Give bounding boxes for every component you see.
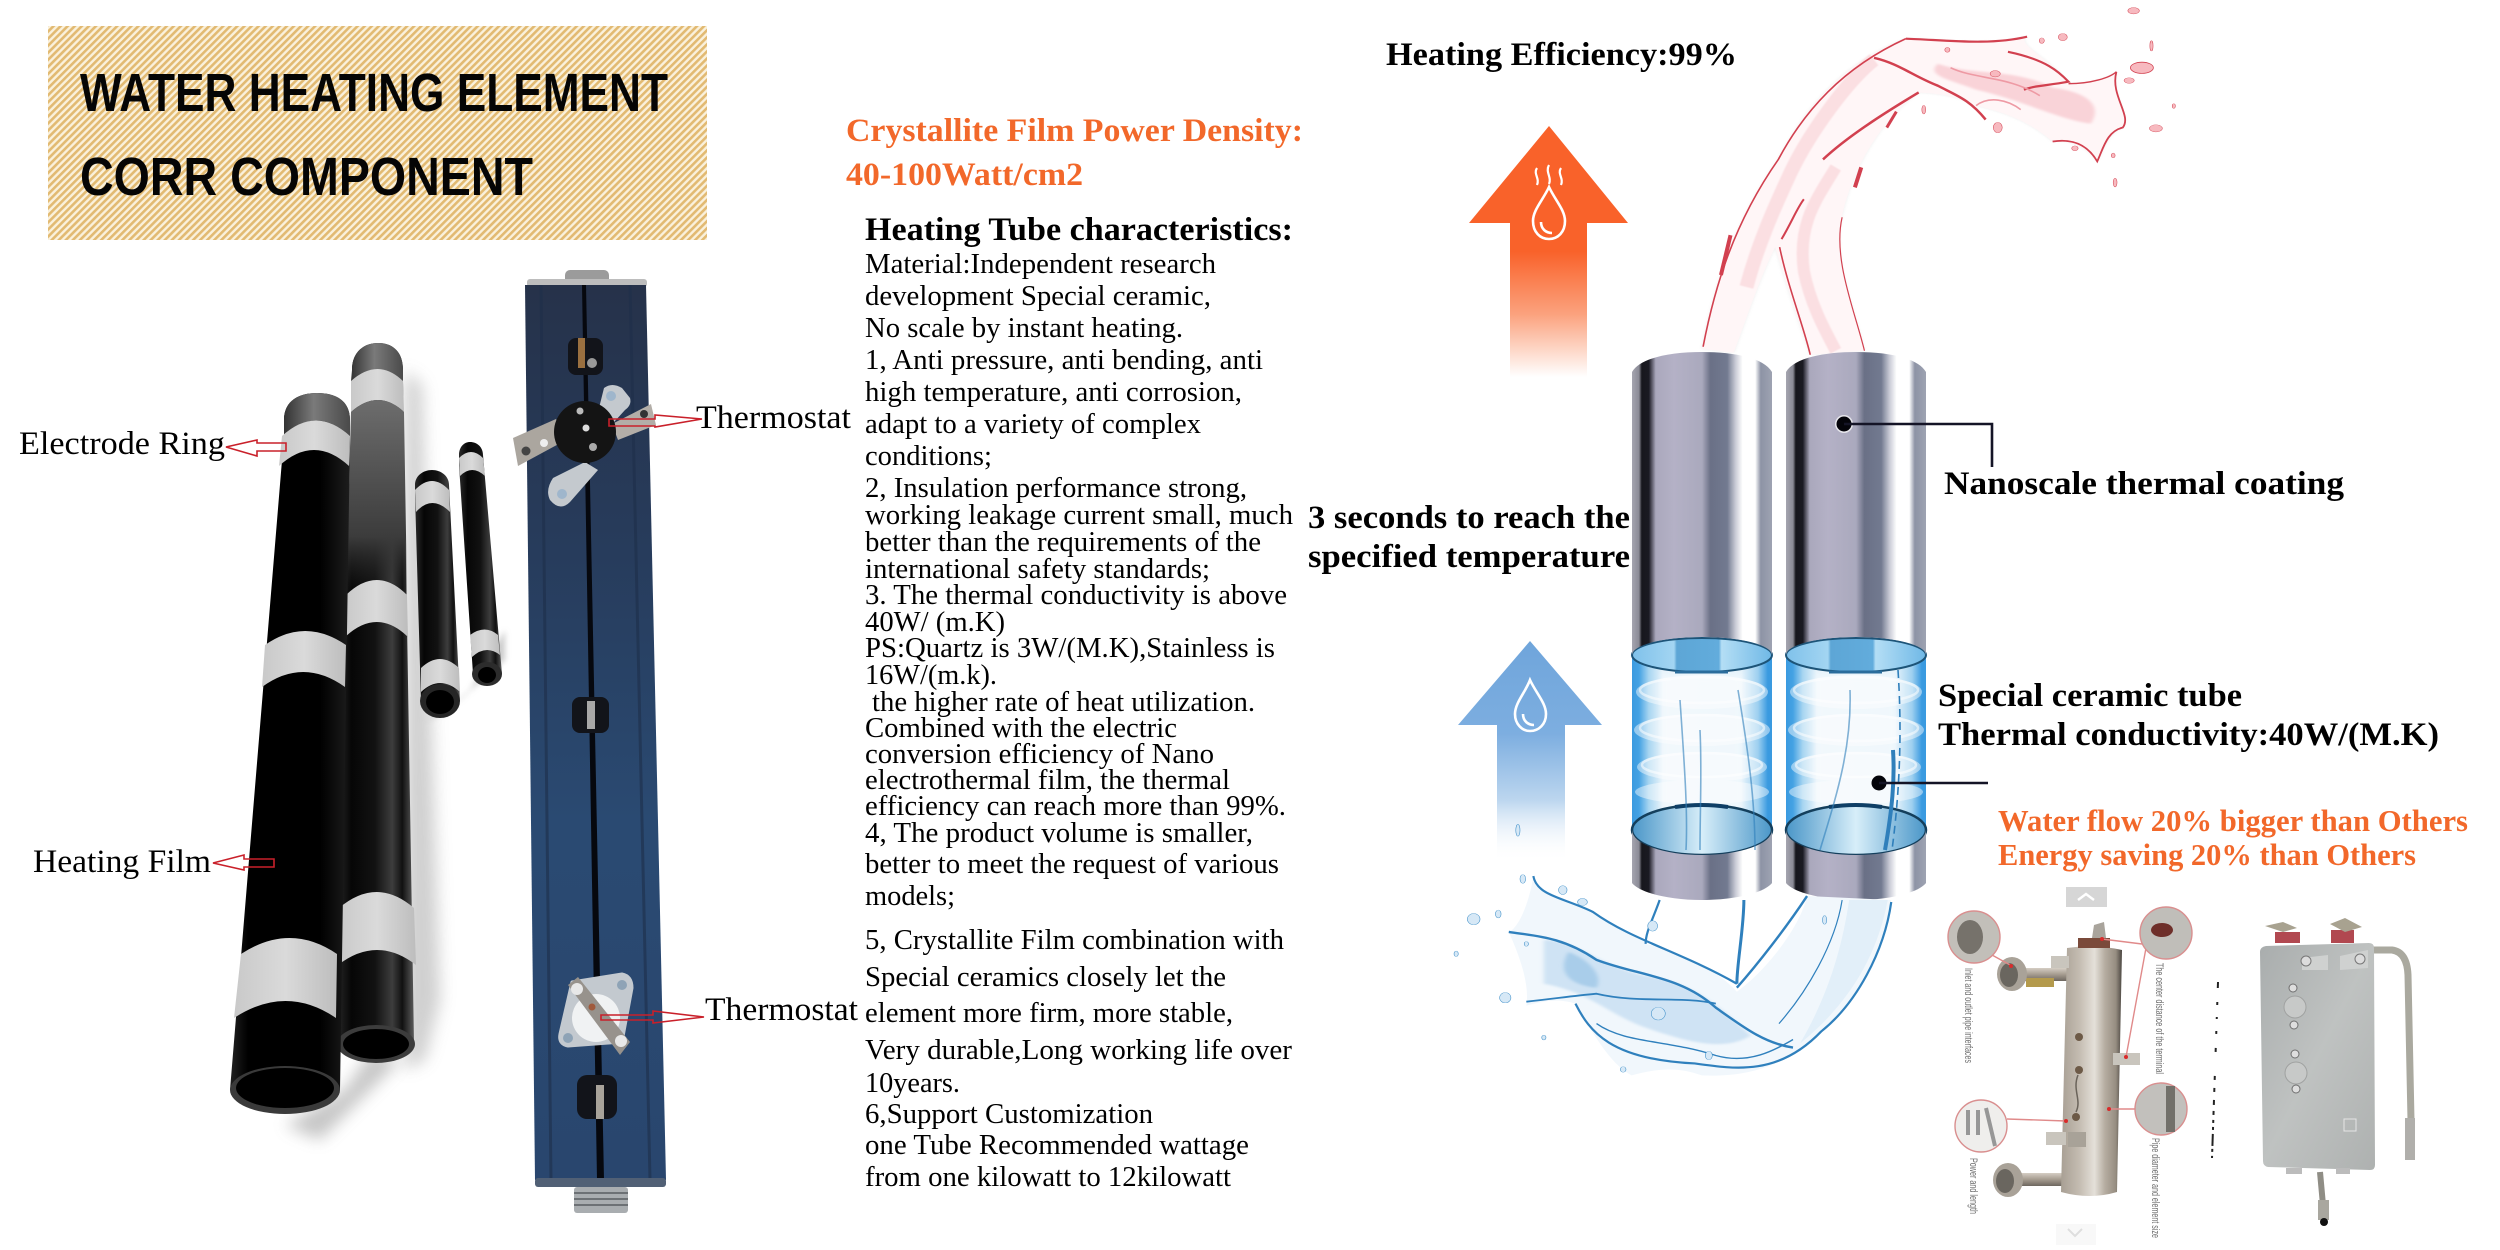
text block: characteristics list: 3. The thermal conductivity is above	[865, 580, 1287, 611]
tube 2 tall	[336, 343, 416, 1063]
bottom water pipe	[2318, 1172, 2329, 1226]
rotated caption: center distance: The center distance of the terminal	[2153, 963, 2165, 1074]
heading: power density: Crystallite Film Power Density:	[846, 113, 1303, 149]
text block: characteristics list: No scale by instant heating.	[865, 313, 1183, 344]
label: heating efficiency: Heating Efficiency:99%	[1386, 37, 1737, 73]
text block: characteristics list: electrothermal film, the thermal	[865, 765, 1230, 796]
callout: nanoscale thermal coating	[1835, 415, 2345, 502]
thermostat top black	[513, 385, 656, 507]
window with terminal middle	[572, 697, 609, 733]
label: Thermostat top	[609, 400, 851, 436]
callout: water flow and energy saving: Energy saving 20% than Others	[1998, 837, 2416, 872]
dashed divider fragments	[2212, 982, 2218, 1158]
text block: characteristics list	[865, 249, 1293, 1193]
text block: characteristics list: conversion efficiency of Nano	[865, 739, 1214, 770]
label: three seconds: 3 seconds to reach the	[1308, 500, 1630, 536]
text block: characteristics list: from one kilowatt to 12kilowatt	[865, 1162, 1231, 1193]
text block: characteristics list: 10years.	[865, 1068, 960, 1099]
text block: characteristics list: Special ceramics closely let the	[865, 962, 1226, 993]
button: scroll up	[2066, 887, 2107, 907]
text block: characteristics list: better than the requirements of the	[865, 527, 1261, 558]
icon: hot water drop	[1533, 165, 1565, 239]
panel: aluminium heater unit	[2260, 918, 2415, 1226]
text block: characteristics list: one Tube Recommended wattage	[865, 1130, 1249, 1161]
water splash: cold blue	[1454, 824, 1891, 1076]
label: Heating Film: Heating Film	[33, 844, 211, 880]
thermostat bottom white	[560, 974, 632, 1055]
panel: blue metal mounting rail	[513, 270, 666, 1213]
rotated caption: inlet: Inlet and outlet pipe interfaces	[1962, 968, 1974, 1063]
title banner	[48, 26, 707, 240]
aluminium body	[2260, 943, 2375, 1174]
text block: characteristics list: Combined with the electric	[865, 713, 1177, 744]
text block: characteristics list: 40W/ (m.K)	[865, 607, 1005, 638]
label: three seconds	[1308, 500, 1630, 575]
window with terminal bottom	[577, 1075, 617, 1119]
label: Electrode Ring: Electrode Ring	[19, 426, 225, 462]
callout: special ceramic tube: Special ceramic tube	[1938, 678, 2242, 714]
text block: characteristics list: 1, Anti pressure, anti bending, anti	[865, 345, 1263, 376]
text block: characteristics list: 4, The product volume is smaller,	[865, 818, 1253, 849]
icon: cold water drop	[1515, 680, 1546, 731]
heading: power density	[846, 113, 1303, 193]
title banner: WATER HEATING ELEMENT	[80, 63, 668, 123]
tube 3 short	[415, 470, 460, 718]
text block: characteristics list: models;	[865, 881, 955, 912]
title banner: CORR COMPONENT	[80, 147, 533, 207]
arrow: cold water up	[1458, 641, 1602, 862]
tube: left	[1632, 352, 1772, 900]
text block: characteristics list: 2, Insulation performance strong,	[865, 473, 1247, 504]
text block: characteristics list: adapt to a variety of complex	[865, 409, 1201, 440]
text block: characteristics list: 5, Crystallite Film combination with	[865, 925, 1284, 956]
text block: characteristics list: PS:Quartz is 3W/(M.K),Stainless is	[865, 633, 1275, 664]
text block: characteristics list: better to meet the request of various	[865, 849, 1279, 880]
callout: nanoscale thermal coating: Nanoscale thermal coating	[1944, 466, 2345, 502]
water streaks in glass	[1680, 670, 1900, 850]
label: Thermostat bottom: Thermostat	[705, 992, 858, 1028]
tube 4 thinnest	[459, 442, 502, 686]
callout: special ceramic tube: Thermal conductivity:40W/(M.K)	[1938, 717, 2439, 753]
terminals	[2265, 918, 2362, 943]
callout: special ceramic tube	[1872, 678, 2439, 790]
label: Thermostat top: Thermostat	[696, 400, 851, 436]
text block: characteristics list: 6,Support Customization	[865, 1099, 1153, 1130]
text block: characteristics list: Material:Independent research	[865, 249, 1216, 280]
panel: twin heating tube diagram	[1632, 352, 1926, 900]
panel: stainless heater with detail circles	[1948, 887, 2192, 1245]
tube: right	[1786, 352, 1926, 900]
button: scroll down	[2056, 1224, 2096, 1245]
heading: heating tube characteristics: Heating Tube characteristics:	[865, 212, 1293, 248]
callout: water flow and energy saving	[1998, 803, 2468, 872]
text block: characteristics list: efficiency can reach more than 99%.	[865, 791, 1286, 822]
heater body	[2046, 922, 2140, 1196]
tube 1 front	[230, 393, 350, 1114]
window with terminal top	[568, 338, 603, 375]
callout: water flow and energy saving: Water flow 20% bigger than Others	[1998, 803, 2468, 838]
water stream: hot red	[1702, 8, 2175, 355]
rotated caption: power and length: Power and length	[1967, 1158, 1979, 1214]
text block: characteristics list: Very durable,Long working life over	[865, 1035, 1293, 1066]
label: Thermostat bottom	[601, 992, 858, 1028]
text block: characteristics list: conditions;	[865, 441, 992, 472]
right water pipe	[2373, 950, 2415, 1160]
text block: characteristics list: the higher rate of heat utilization.	[872, 687, 1255, 718]
arrow: hot water up	[1469, 126, 1628, 377]
text block: characteristics list: 16W/(m.k).	[865, 660, 997, 691]
panel: black heating tubes	[230, 343, 505, 1140]
text block: characteristics list: high temperature, anti corrosion,	[865, 377, 1242, 408]
detail circles with leader lines	[1948, 907, 2192, 1152]
bottom connector	[535, 1178, 666, 1213]
text block: characteristics list: working leakage current small, much	[865, 500, 1293, 531]
heater pipes and nuts	[1993, 957, 2070, 1197]
text block: characteristics list: development Special ceramic,	[865, 281, 1211, 312]
label: three seconds: specified temperature	[1308, 539, 1630, 575]
text block: characteristics list: element more firm, more stable,	[865, 998, 1233, 1029]
text block: characteristics list: international safety standards;	[865, 554, 1210, 585]
heading: power density: 40-100Watt/cm2	[846, 157, 1083, 193]
top connector	[527, 270, 647, 287]
